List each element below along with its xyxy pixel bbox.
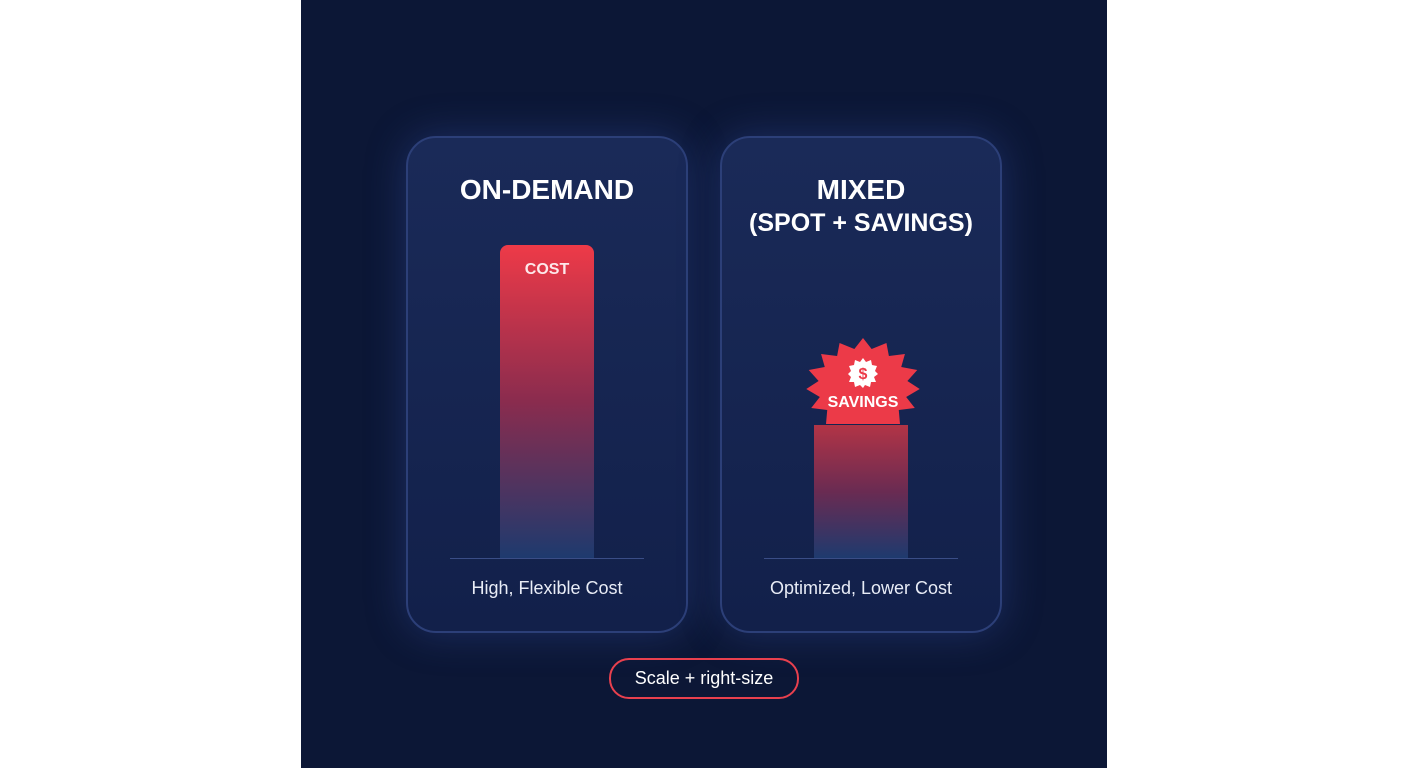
panel: mixed xyxy=(720,136,1002,633)
pill: scale + right-size: Scale + right-size xyxy=(635,668,773,688)
pill: scale + right-size xyxy=(609,658,799,699)
bar: reduced cost xyxy=(814,425,908,558)
bar: cost: COST xyxy=(525,261,569,278)
icon: savings badge xyxy=(806,338,920,424)
icon: savings badge: SAVINGS xyxy=(828,394,898,411)
heading: mixed: (SPOT + SAVINGS) xyxy=(749,209,973,237)
icon: savings badge: $ xyxy=(859,366,868,383)
heading: mixed xyxy=(749,174,973,237)
bar: cost xyxy=(500,245,594,558)
caption: optimized lower cost: Optimized, Lower Cost xyxy=(770,578,952,598)
caption: high flexible cost: High, Flexible Cost xyxy=(471,578,623,598)
panel: on-demand xyxy=(406,136,688,633)
heading: on-demand: ON-DEMAND xyxy=(460,174,634,205)
heading: mixed: MIXED xyxy=(817,174,905,205)
